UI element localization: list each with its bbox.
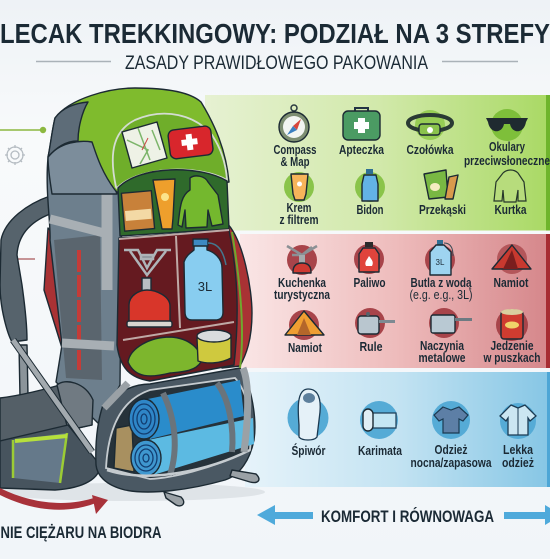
icon: can [496,309,528,341]
mesh back panel [54,235,102,380]
label: sunglasses [464,140,550,168]
icon: headlamp [408,110,452,140]
shoulder strap [0,196,50,342]
water bottle 3L: 3L [198,279,212,294]
label: sunglasses: Okulary [489,140,525,154]
subtitle: ZASADY PRAWIDŁOWEGO PAKOWANIA [125,53,428,74]
panel: middle zone red [240,234,550,368]
label: jacket: Kurtka [494,203,527,217]
icon: metal pan [429,308,472,338]
label: canned food: Jedzenie [490,339,534,353]
icon: sleeping bag [288,389,328,440]
icon: tent orange [285,310,324,340]
label: light clothes: Lekka [503,443,534,457]
label: snacks: Przekąski [419,203,466,217]
ground shadow [0,483,265,501]
water bottle 3L [184,239,226,320]
icon: fuel [354,242,384,274]
label: sunscreen: Krem [286,201,312,215]
label: compass and map [274,143,317,169]
arrow: weight to hips [0,488,108,514]
top lid [48,88,229,195]
icon: bottle [355,169,385,202]
label: comfort and balance: KOMFORT I RÓWNOWAGA [321,507,494,526]
food can [197,330,231,363]
icon: light shirt [500,403,536,439]
green compartment [118,170,229,236]
label: compass and map: Compass [274,143,317,157]
green stuff sack [128,337,201,376]
label: tent: Namiot [288,341,323,355]
label: spare clothes: nocna/zapasowa [410,456,492,470]
diagonal compression strap [13,340,92,452]
label: water jug [410,276,472,302]
gray lid corner [48,102,88,157]
label: metal pans: metalowe [418,351,466,365]
icon: sunscreen [284,172,314,202]
red stripe [77,250,81,370]
arrow: right balance [504,505,550,525]
top sleeping pad roll [129,380,244,439]
hip pocket [0,425,100,490]
icon: t-shirt [432,401,470,439]
label: first aid: Apteczka [339,143,385,157]
panel: top zone green [205,95,550,230]
first aid kit [167,125,214,159]
arrow: left balance [257,505,313,525]
pocket opening [106,378,251,479]
main body [47,150,122,425]
bottom loops [164,470,259,506]
icon: mat [360,401,398,439]
label: stove: turystyczna [274,288,331,302]
zone marker: green line [0,127,46,133]
hood [48,141,117,194]
label: light clothes: odzież [502,456,534,470]
lower strap [19,345,28,398]
backpack illustration [0,88,259,506]
icon: gear [5,145,25,165]
bottom sleeping pad roll [131,418,254,476]
label: light clothes [502,443,534,470]
label: canned food [483,339,540,365]
icon: water jug [425,240,455,275]
zone marker: red line [0,258,35,260]
right edge green strap [232,232,242,368]
icon: snacks [424,170,458,199]
label: spare clothes [410,443,492,470]
icon: water jug: 3L [436,258,445,267]
label: spare clothes: Odzież [434,443,468,457]
label: stove: Kuchenka [278,276,327,290]
label: weight to hips: NIE CIĘŻARU NA BIODRA [0,524,162,542]
red compartment [117,230,237,381]
icon: compass [279,105,309,142]
label: mat: Karimata [358,444,403,458]
red side panels [44,222,252,368]
icon: sunglasses [486,109,528,141]
icon: first aid [343,108,380,140]
panel: bottom zone blue [245,372,550,487]
label: metal pans [418,339,466,365]
label: water jug: (e.g. e.g., 3L) [410,288,472,302]
map [122,122,167,168]
label: pots: Rule [360,340,383,354]
label: tent: Namiot [494,276,529,290]
lumbar pad [57,382,93,430]
icon: tent red [492,244,531,274]
tan bag [114,425,134,472]
compartment dividers [119,230,234,340]
pocket straps [104,368,250,476]
icon: pot [355,308,395,338]
snack [121,191,155,231]
gray straps [50,190,114,346]
label: fuel: Paliwo [354,276,386,290]
label: water jug: Butla z wodą [410,276,472,290]
icon: stove [287,245,317,275]
label: sunscreen: z filtrem [280,213,318,227]
lid pocket [113,114,227,188]
icon: jacket [494,170,526,202]
label: sunscreen [280,201,318,227]
label: metal pans: Naczynia [420,339,465,353]
lower pocket [96,368,255,492]
stove [124,250,171,275]
sunscreen [153,179,175,229]
gas canister [127,278,172,327]
label: headlamp: Czołówka [406,143,454,157]
label: compass and map: & Map [280,155,310,169]
hip belt [0,382,92,442]
label: stove [274,276,331,302]
label: bottle: Bidon [356,203,384,217]
label: sleeping bag: Śpiwór [292,443,326,458]
jacket [178,176,223,228]
